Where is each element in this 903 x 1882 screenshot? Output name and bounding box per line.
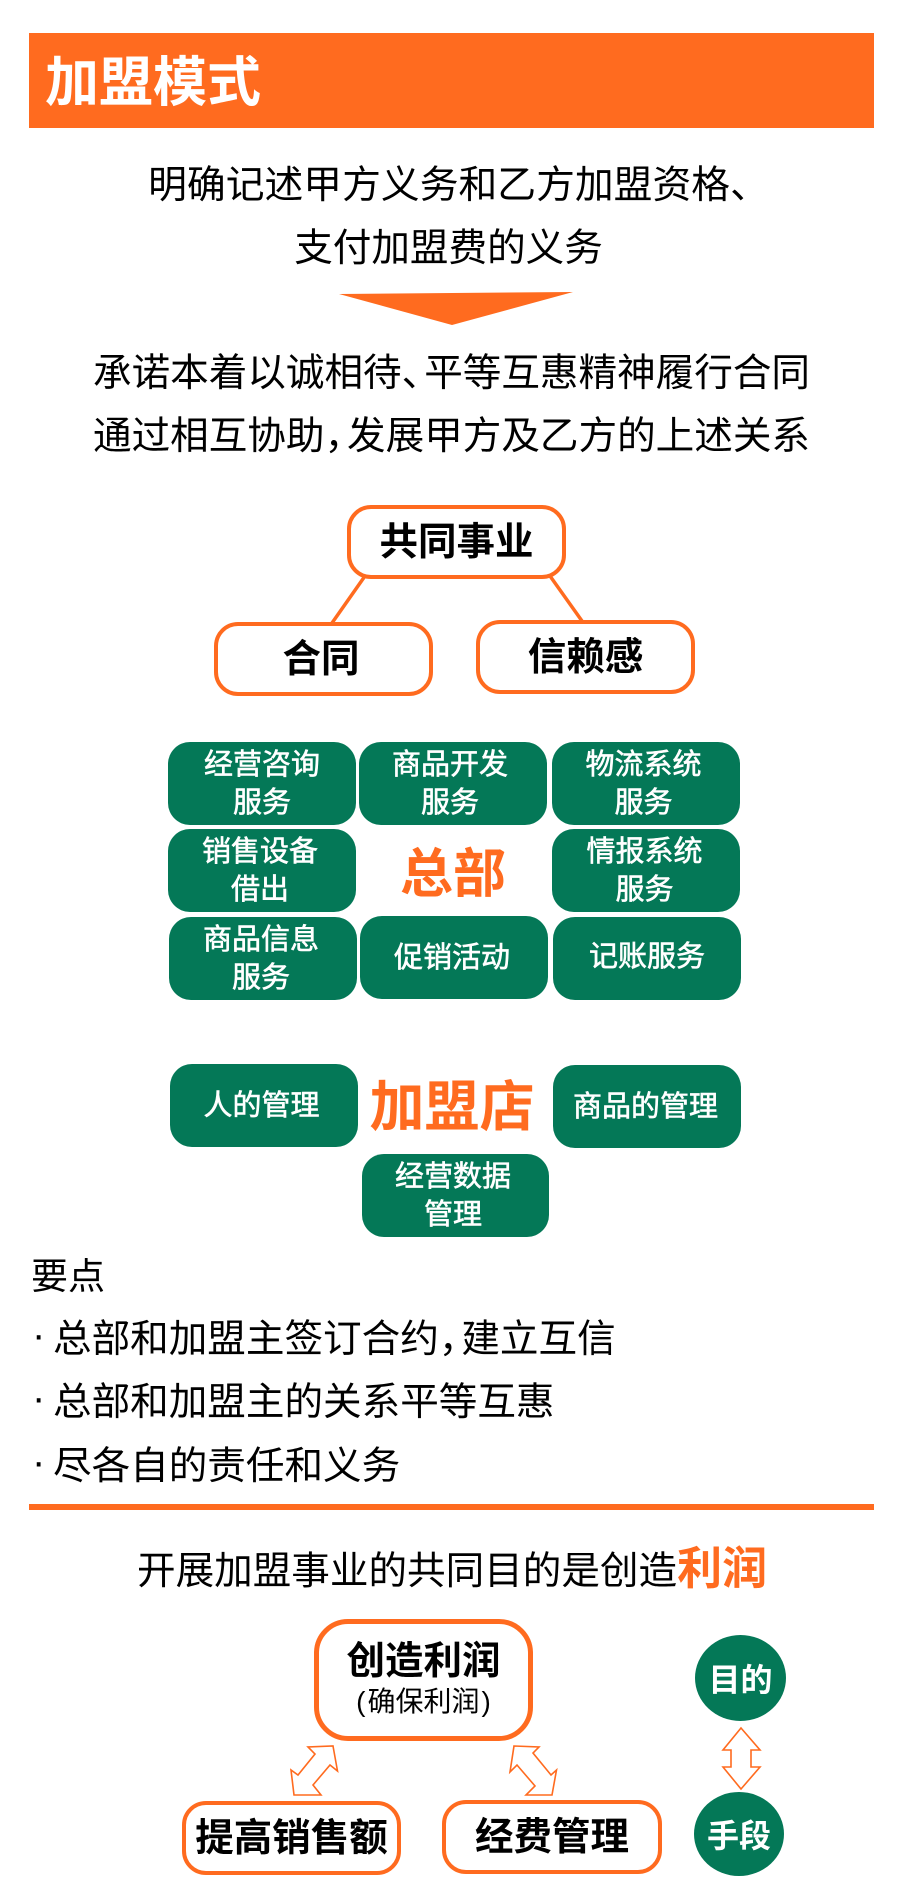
service: promotion: 促销活动 [394,942,510,974]
text: obligations line 2: 支付加盟费的义务 [294,227,603,270]
service: equipment loan: 借出 [231,874,289,906]
box: contract: 合同 [282,638,360,681]
task: people management: 人的管理 [203,1090,320,1122]
box: create profit [314,1619,533,1741]
connector lines [330,576,584,622]
service: logistics [552,742,740,825]
arrow: vertical double arrow [721,1726,762,1790]
box: create profit: 创造利润 [346,1640,500,1683]
title banner: 加盟模式 [45,53,261,113]
service: equipment loan: 销售设备 [202,836,318,868]
service: promotion [360,916,548,999]
service: consulting [168,742,356,825]
bullet 2: · [32,1376,45,1420]
box: joint business [347,505,566,579]
box: raise sales [182,1801,401,1875]
service: information system [552,829,740,912]
service: bookkeeping [553,917,741,1000]
service: product development [359,742,547,825]
box: create profit: (确保利润) [356,1686,491,1717]
box: contract [214,622,433,696]
box: joint business: 共同事业 [379,521,534,564]
service: bookkeeping: 记账服务 [589,940,705,972]
circle: purpose: 目的 [708,1662,772,1698]
arrow: double arrow right [508,1745,558,1796]
box: trust [476,620,695,694]
box: trust: 信赖感 [528,636,643,679]
divider line [29,1504,874,1510]
service: equipment loan [168,829,356,912]
arrow: down triangle [339,292,573,325]
service: product development: 服务 [421,786,479,818]
text: commitment line 1: 承诺本着以诚相待、平等互惠精神履行合同 [93,352,810,395]
service: information system: 服务 [615,874,674,906]
heading: key points: 要点 [31,1256,105,1297]
bullet 2: 总部和加盟主的关系平等互惠 [53,1381,555,1424]
service: product information [169,917,357,1000]
arrow: double arrow left [290,1745,339,1796]
service: logistics: 物流系统 [585,748,702,780]
task: people management [170,1064,358,1147]
task: product management [553,1065,741,1148]
bullet 1: 总部和加盟主签订合约，建立互信 [53,1318,616,1361]
service: product information: 商品信息 [203,924,319,956]
service: logistics: 服务 [614,786,672,818]
text: commitment line 2: 通过相互协助，发展甲方及乙方的上述关系 [93,415,810,458]
circle: means [694,1792,784,1876]
text: obligations line 1: 明确记述甲方义务和乙方加盟资格、 [148,164,753,207]
service: information system: 情报系统 [586,836,702,868]
box: expense management [442,1800,662,1874]
bullet 3: · [32,1440,45,1484]
heading: headquarters: 总部 [400,845,506,904]
circle: means: 手段 [707,1818,771,1854]
service: consulting: 经营咨询 [204,748,320,780]
circle: purpose [695,1635,786,1721]
task: product management: 商品的管理 [573,1090,718,1122]
bullet 1: · [32,1313,45,1357]
bullet 3: 尽各自的责任和义务 [53,1445,400,1488]
text: common goal is profit: 开展加盟事业的共同目的是创造利润 [137,1543,767,1594]
title banner [29,33,874,128]
task: business data management: 经营数据 [395,1160,511,1192]
task: business data management [362,1154,549,1237]
box: expense management: 经费管理 [475,1816,629,1859]
service: product information: 服务 [232,962,290,994]
service: consulting: 服务 [233,786,291,818]
box: raise sales: 提高销售额 [195,1817,388,1860]
heading: franchise store: 加盟店 [369,1076,534,1138]
task: business data management: 管理 [424,1198,482,1230]
service: product development: 商品开发 [392,748,508,780]
